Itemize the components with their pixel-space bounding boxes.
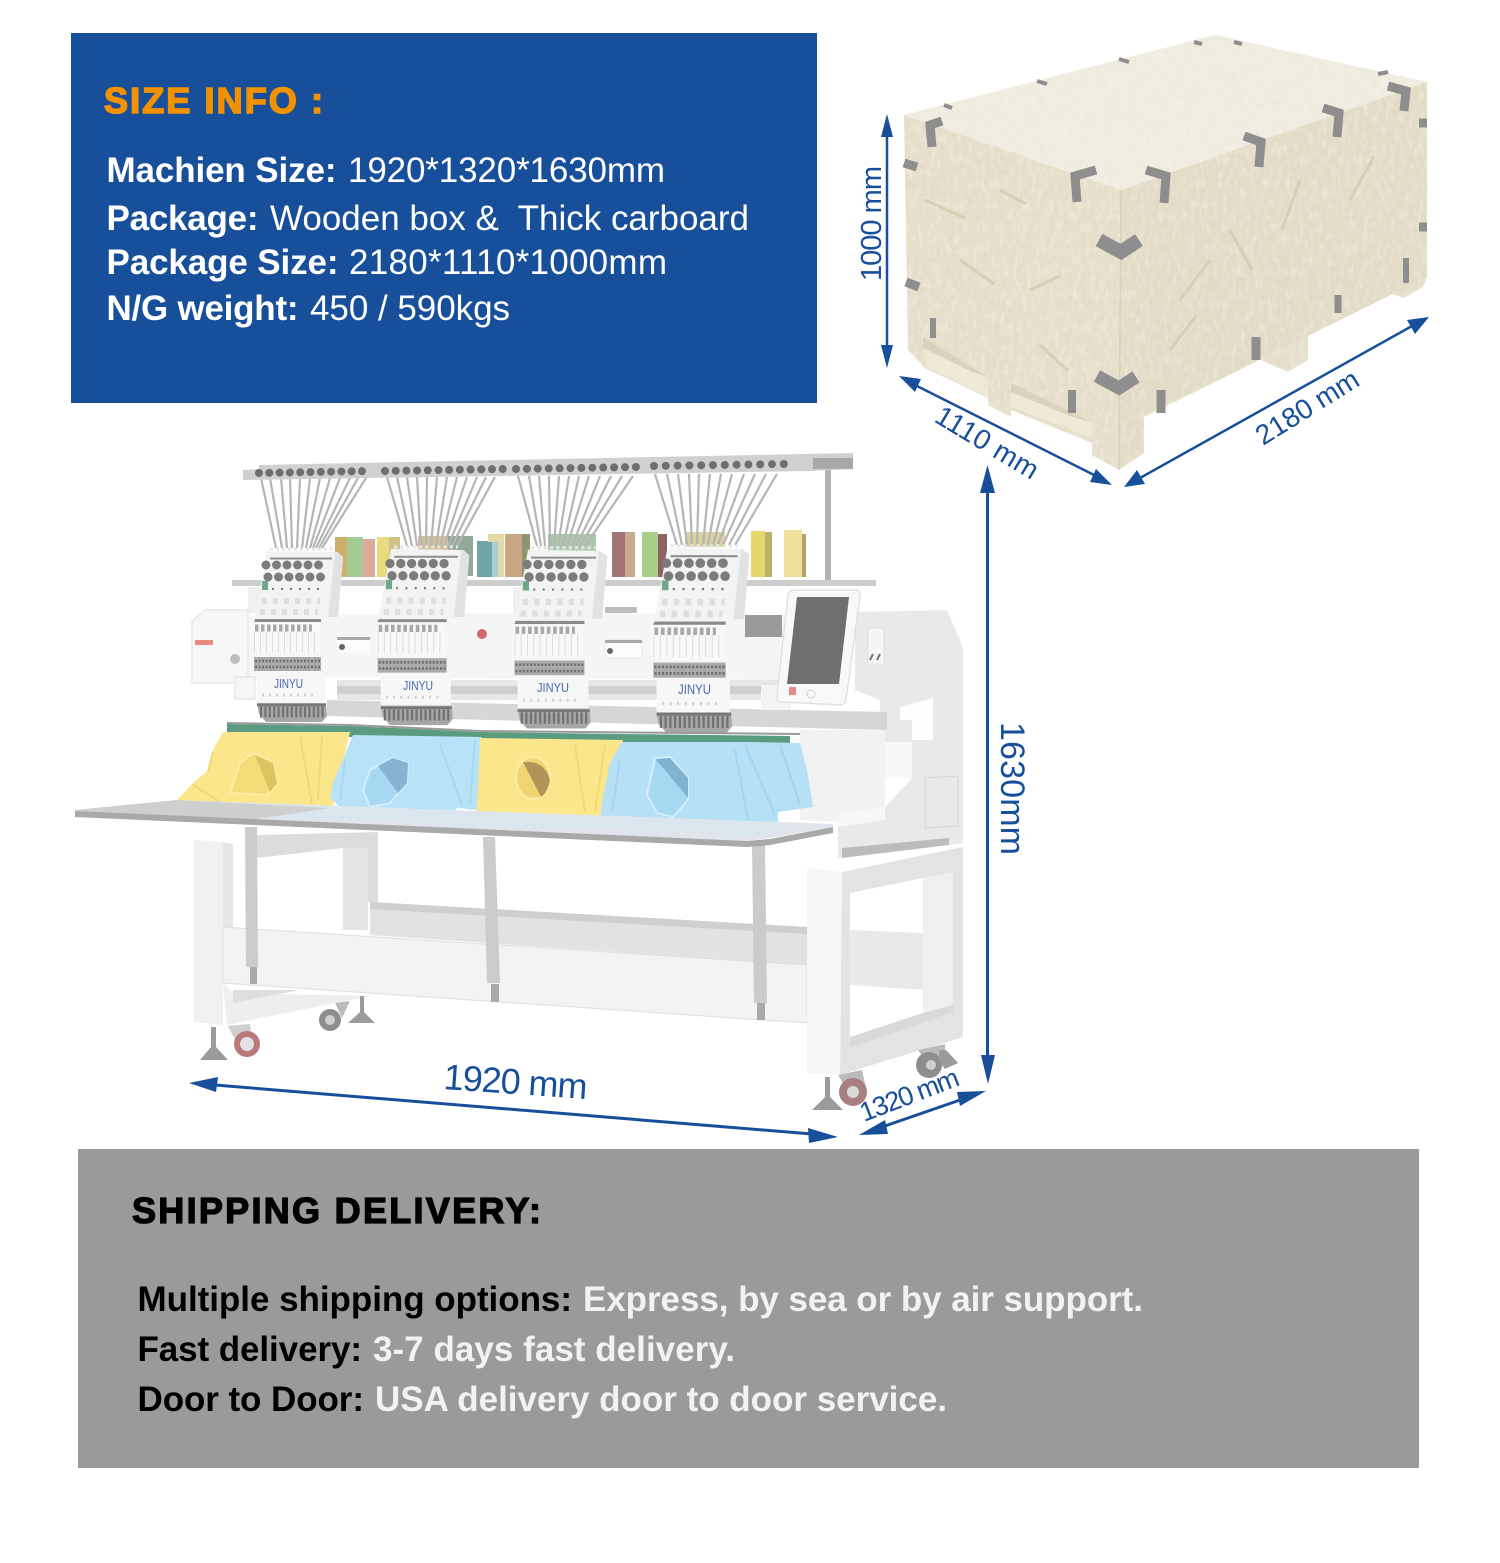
dimension: crate length 2180 mm xyxy=(1124,317,1429,487)
warning sticker 2 xyxy=(605,640,642,658)
left end box xyxy=(192,610,255,699)
embroidery head 4 xyxy=(651,546,749,733)
embroidery head 2 xyxy=(376,547,469,725)
rear left foot xyxy=(348,996,375,1023)
text: machine size: 1920*1320*1630mm xyxy=(348,151,665,190)
yellow shirt 1 xyxy=(177,732,350,808)
rear right foot xyxy=(938,1050,958,1069)
text: door to door: Door to Door: xyxy=(138,1380,364,1419)
text: package: Wooden box & Thick carboard xyxy=(270,199,749,238)
wood grain texture xyxy=(905,86,1427,470)
heading: size info: SIZE INFO : xyxy=(104,80,323,121)
dimension: crate width 1110 mm xyxy=(899,376,1112,485)
metal straps xyxy=(904,42,1427,413)
dimension: crate height 1000 mm xyxy=(856,114,893,368)
text: machine size: Machien Size: xyxy=(106,151,336,190)
front cross beam xyxy=(223,927,807,1023)
text: machine size xyxy=(106,151,665,190)
embroidery head 1: JINYU xyxy=(274,676,303,691)
text: shipping options: Multiple shipping options: xyxy=(138,1280,572,1319)
text: net and gross weight: 450 / 590kgs xyxy=(310,289,510,328)
text: package: Package: xyxy=(106,199,258,238)
right foot xyxy=(812,1077,843,1110)
red badge xyxy=(477,629,487,639)
text: shipping options xyxy=(138,1280,1143,1319)
dimension: machine height 1630mm xyxy=(980,465,1031,1084)
dimension: crate width 1110 mm: 1110 mm xyxy=(930,400,1044,485)
right side housing xyxy=(800,610,963,858)
hoops xyxy=(227,723,800,745)
embroidery head 3: JINYU xyxy=(537,680,569,695)
text: door to door: USA delivery door to door service. xyxy=(375,1380,947,1419)
embroidery head 2: JINYU xyxy=(403,678,433,693)
dimension: machine width 1920 mm xyxy=(189,1056,838,1143)
embroidery machine xyxy=(75,453,963,1110)
text: fast delivery xyxy=(138,1330,735,1369)
panel: size info xyxy=(71,33,817,403)
table top xyxy=(75,800,833,847)
text: package size: 2180*1110*1000mm xyxy=(349,243,667,282)
shirts xyxy=(177,732,813,822)
embroidery head 3 xyxy=(512,548,607,728)
screen bracket xyxy=(761,685,791,710)
left foot xyxy=(200,1027,228,1060)
dimension: machine width 1920 mm: 1920 mm xyxy=(442,1056,589,1107)
thread tubes xyxy=(261,474,777,548)
wooden crate xyxy=(895,30,1435,475)
text: package size xyxy=(106,243,667,282)
rear rail xyxy=(327,680,887,730)
thread spools xyxy=(335,530,806,577)
text: fast delivery: 3-7 days fast delivery. xyxy=(373,1330,735,1369)
touch screen xyxy=(777,590,860,705)
table support struts xyxy=(245,827,767,1020)
rear legs and rear beam xyxy=(257,832,807,965)
text: package size: Package Size: xyxy=(106,243,338,282)
yellow shirt 2 xyxy=(477,738,623,818)
dimension: crate height 1000 mm: 1000 mm xyxy=(856,166,888,281)
text: shipping options: Express, by sea or by air support. xyxy=(583,1280,1143,1319)
embroidery head 4: JINYU xyxy=(678,682,711,697)
heading: shipping delivery: SHIPPING DELIVERY: xyxy=(132,1190,541,1231)
rear right caster xyxy=(916,1044,945,1078)
casters and feet xyxy=(200,996,958,1110)
rear left caster xyxy=(319,1001,350,1031)
right leg frame xyxy=(807,847,963,1075)
text: net and gross weight: N/G weight: xyxy=(106,289,298,328)
panel: shipping delivery xyxy=(78,1149,1419,1468)
left leg xyxy=(194,840,373,1025)
warning sticker 1 xyxy=(337,637,370,653)
pallet openings xyxy=(923,337,1092,438)
thread post xyxy=(825,468,831,580)
text: fast delivery: Fast delivery: xyxy=(138,1330,362,1369)
main beam xyxy=(192,607,791,710)
left caster xyxy=(228,1024,260,1057)
blue shirt 1 xyxy=(330,735,482,813)
blue shirt 2 xyxy=(600,742,813,822)
embroidery head 1 xyxy=(252,549,343,722)
thread shelf xyxy=(232,580,876,613)
dimension: machine height 1630mm: 1630mm xyxy=(993,722,1031,855)
thread tension bar xyxy=(243,453,853,480)
dimension: crate length 2180 mm: 2180 mm xyxy=(1250,363,1365,451)
text: net and gross weight xyxy=(106,289,510,328)
crate faces xyxy=(904,35,1427,470)
right caster xyxy=(838,1070,867,1106)
dimension: machine depth 1320 mm: 1320 mm xyxy=(855,1062,963,1128)
